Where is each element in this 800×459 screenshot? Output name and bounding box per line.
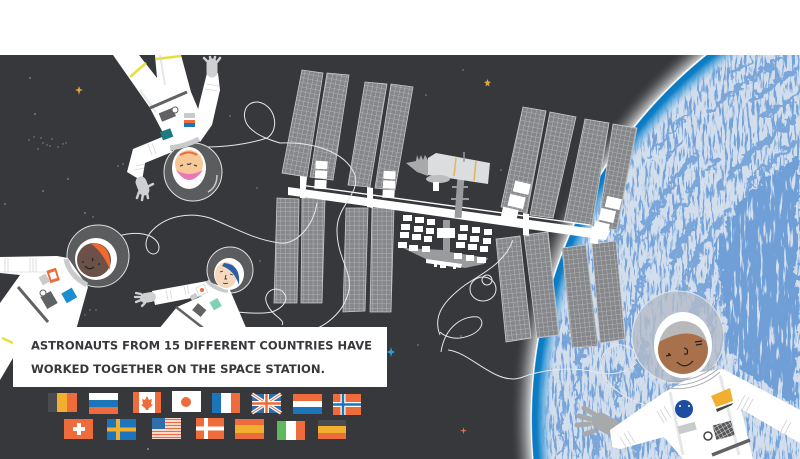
upper left solar panels [282, 70, 413, 190]
gold star top [484, 79, 491, 86]
station truss [288, 161, 622, 244]
lower right solar panels [496, 232, 625, 348]
radiators [398, 215, 492, 269]
astronaut: left, Canadian flag [0, 225, 129, 380]
astronaut: bottom right [577, 291, 800, 459]
Germany [318, 420, 346, 439]
background stars [4, 69, 502, 450]
hood and face [75, 238, 117, 280]
Spain [235, 419, 264, 439]
glove [135, 293, 151, 306]
Japan [172, 391, 201, 412]
upper right solar panels [501, 107, 637, 230]
glove [577, 408, 613, 434]
solar arrays [274, 70, 637, 348]
Russia [89, 393, 118, 414]
Italy [277, 421, 305, 440]
glove [137, 182, 153, 200]
helmet [632, 291, 724, 383]
hood [654, 312, 712, 378]
mission patches [675, 388, 735, 440]
hood and face [214, 258, 244, 290]
orange star [460, 427, 467, 434]
collar [170, 139, 199, 148]
caption text: ASTRONAUTS FROM 15 DIFFERENT COUNTRIES HAVE [31, 338, 372, 352]
chest patches [159, 107, 195, 140]
astronaut: centre, blue cap [135, 247, 253, 331]
face [658, 321, 708, 374]
caption box [13, 327, 387, 387]
Sweden [107, 419, 136, 440]
Switzerland [64, 419, 93, 439]
Belgium [48, 393, 77, 412]
patches [190, 284, 222, 317]
United States [152, 418, 181, 439]
gold star left [75, 86, 83, 95]
flags [48, 391, 361, 440]
astronaut: top, upside down [113, 55, 222, 201]
caption text [31, 338, 372, 376]
central station module [406, 152, 490, 218]
hood and face [172, 147, 206, 189]
collar [665, 366, 720, 389]
earth [510, 55, 800, 459]
Netherlands [293, 394, 322, 414]
Canada [133, 392, 161, 413]
helmet [164, 143, 222, 201]
open ocean patch [716, 155, 798, 405]
tether lines [110, 102, 653, 407]
suit [610, 369, 800, 459]
lower left solar panels [274, 198, 394, 312]
caption text: WORKED TOGETHER ON THE SPACE STATION. [31, 362, 325, 376]
flag patch [39, 268, 77, 309]
Norway [333, 394, 361, 415]
Denmark [196, 418, 224, 439]
blue star [387, 347, 395, 357]
France [212, 393, 240, 413]
glove [204, 57, 220, 72]
United Kingdom [252, 394, 281, 413]
